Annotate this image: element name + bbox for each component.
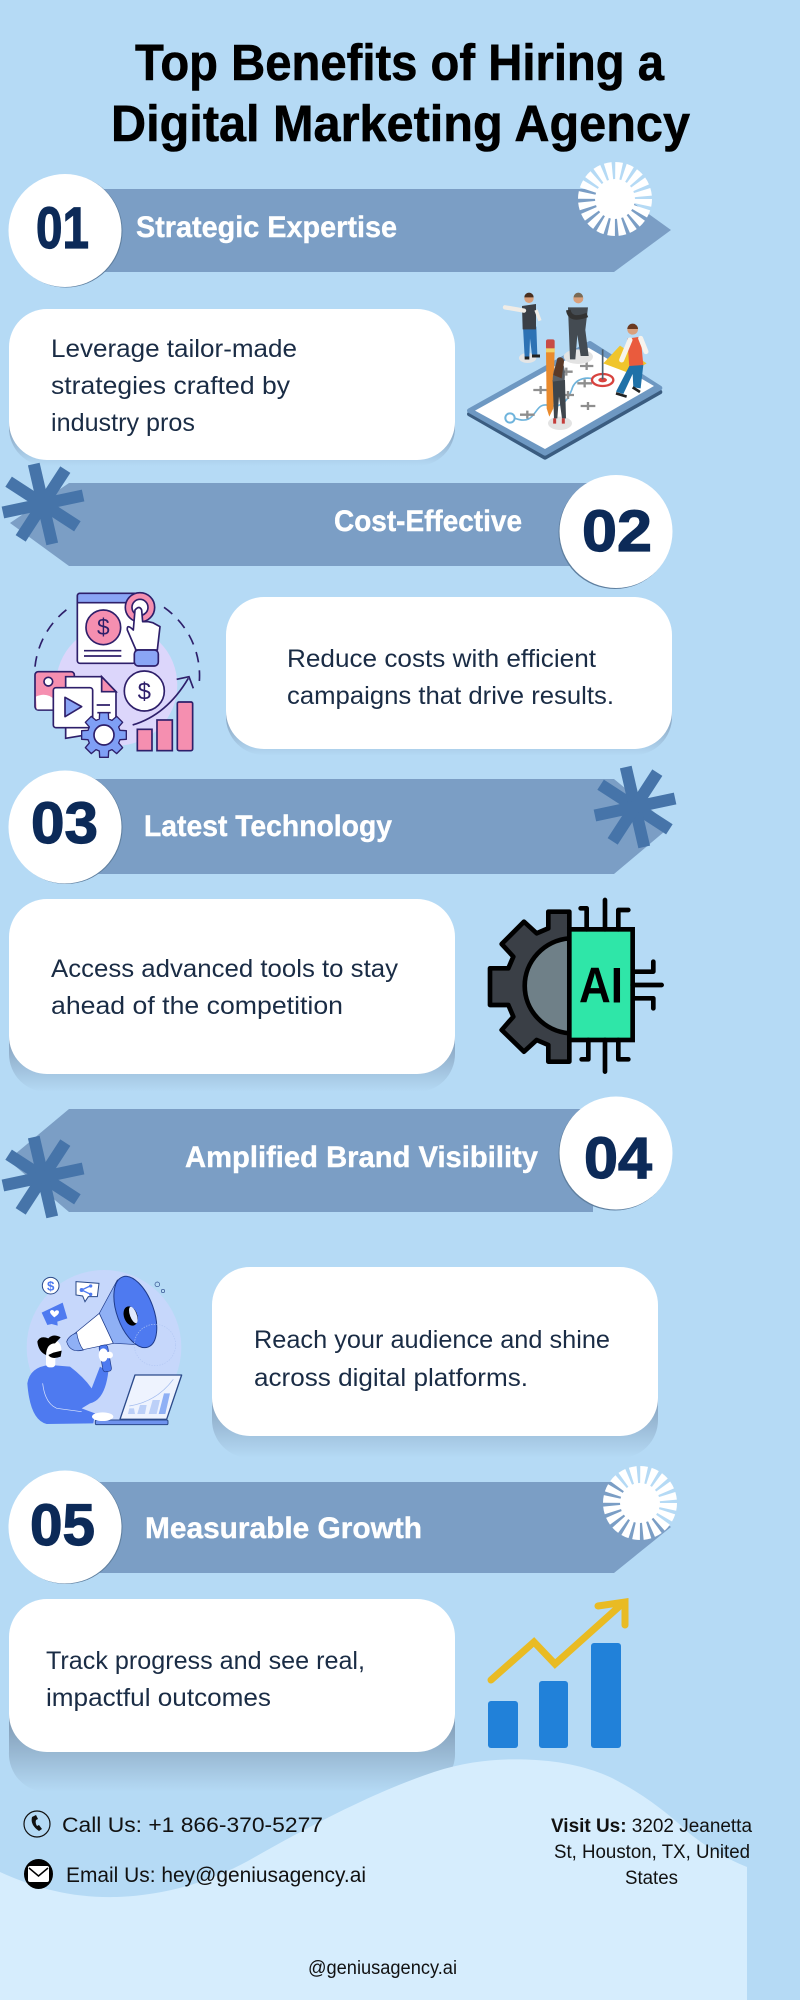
panel: card 05 xyxy=(9,1599,455,1792)
title xyxy=(111,34,691,152)
card 02 text: Reduce costs with efficient xyxy=(287,645,596,673)
panel: card 04 xyxy=(212,1267,658,1458)
card 04 text: Reach your audience and shine xyxy=(254,1326,610,1354)
section 01 banner xyxy=(8,172,671,288)
asterisk decoration 03 xyxy=(594,766,676,848)
section 04 banner xyxy=(2,1096,672,1218)
heading 03: Latest Technology xyxy=(144,810,392,843)
banner arrow 01 xyxy=(90,189,671,272)
phone contact xyxy=(24,1811,323,1837)
card 03 text xyxy=(51,955,399,1020)
panel: card 01 xyxy=(9,309,455,466)
banner arrow 04 xyxy=(8,1109,593,1212)
section 05 banner xyxy=(8,1470,671,1584)
card 01 text: strategies crafted by xyxy=(51,372,291,400)
number badge 03: 03 xyxy=(31,791,98,856)
card 04 text: across digital platforms. xyxy=(254,1364,528,1392)
banner arrow 02 xyxy=(10,483,600,566)
asterisk decoration 04 xyxy=(2,1136,84,1218)
icon: email xyxy=(24,1859,53,1889)
number badge 02: 02 xyxy=(582,499,652,564)
visit address: St, Houston, TX, United xyxy=(554,1842,750,1863)
card 05 text xyxy=(46,1647,365,1712)
heading 05: Measurable Growth xyxy=(145,1512,422,1545)
number badge 03 xyxy=(8,770,122,884)
heading 04: Amplified Brand Visibility xyxy=(185,1141,538,1174)
section 02 banner xyxy=(2,463,672,589)
section 03 banner xyxy=(8,766,676,884)
number badge 01: 01 xyxy=(36,196,89,261)
number badge 04 xyxy=(558,1096,672,1210)
footer wave shape xyxy=(0,1759,747,2000)
title: Digital Marketing Agency xyxy=(111,95,691,152)
icon: strategy team on tablet xyxy=(469,293,660,457)
asterisk decoration 02 xyxy=(2,463,84,545)
card 02 text: campaigns that drive results. xyxy=(287,682,614,710)
heading 01: Strategic Expertise xyxy=(136,211,397,244)
visit address: States xyxy=(625,1868,678,1889)
icon: AI gear and chip: AI xyxy=(579,958,623,1014)
card 01 text: industry pros xyxy=(51,409,195,437)
card 03 text: ahead of the competition xyxy=(51,992,343,1020)
icon: pay per click marketing: $ xyxy=(138,678,151,705)
email text: Email Us: hey@geniusagency.ai xyxy=(66,1864,366,1887)
number badge 05 xyxy=(8,1470,122,1584)
number badge 02 xyxy=(558,475,672,589)
card 02 text xyxy=(287,645,614,710)
footer handle: @geniusagency.ai xyxy=(308,1958,457,1979)
sunburst decoration 01 xyxy=(588,172,642,226)
card 01 text: Leverage tailor-made xyxy=(51,335,297,363)
number badge 04: 04 xyxy=(584,1126,652,1191)
visit address xyxy=(551,1816,752,1889)
number badge 01 xyxy=(8,174,122,288)
banner arrow 05 xyxy=(90,1482,671,1573)
card 05 text: Track progress and see real, xyxy=(46,1647,365,1675)
sunburst decoration 05 xyxy=(612,1476,668,1530)
panel: card 03 xyxy=(9,899,455,1092)
card 05 text: impactful outcomes xyxy=(46,1684,271,1712)
icon: growth bar chart with arrow xyxy=(488,1602,625,1748)
icon: man with megaphone and laptop: $ xyxy=(47,1279,55,1294)
icon: man with megaphone and laptop xyxy=(27,1270,182,1425)
phone text: Call Us: +1 866-370-5277 xyxy=(62,1814,323,1837)
icon: phone xyxy=(24,1811,50,1837)
card 01 text xyxy=(51,335,297,437)
visit address: Visit Us: 3202 Jeanetta xyxy=(551,1816,752,1837)
card 03 text: Access advanced tools to stay xyxy=(51,955,399,983)
banner arrow 03 xyxy=(90,779,671,874)
icon: pay per click marketing xyxy=(35,593,200,757)
email contact xyxy=(24,1859,366,1889)
icon: AI gear and chip xyxy=(490,900,662,1072)
number badge 05: 05 xyxy=(30,1493,95,1558)
card 04 text xyxy=(254,1326,610,1392)
heading 02: Cost-Effective xyxy=(334,505,522,538)
title: Top Benefits of Hiring a xyxy=(135,34,665,91)
panel: card 02 xyxy=(226,597,672,755)
icon: pay per click marketing: $ xyxy=(97,614,110,640)
